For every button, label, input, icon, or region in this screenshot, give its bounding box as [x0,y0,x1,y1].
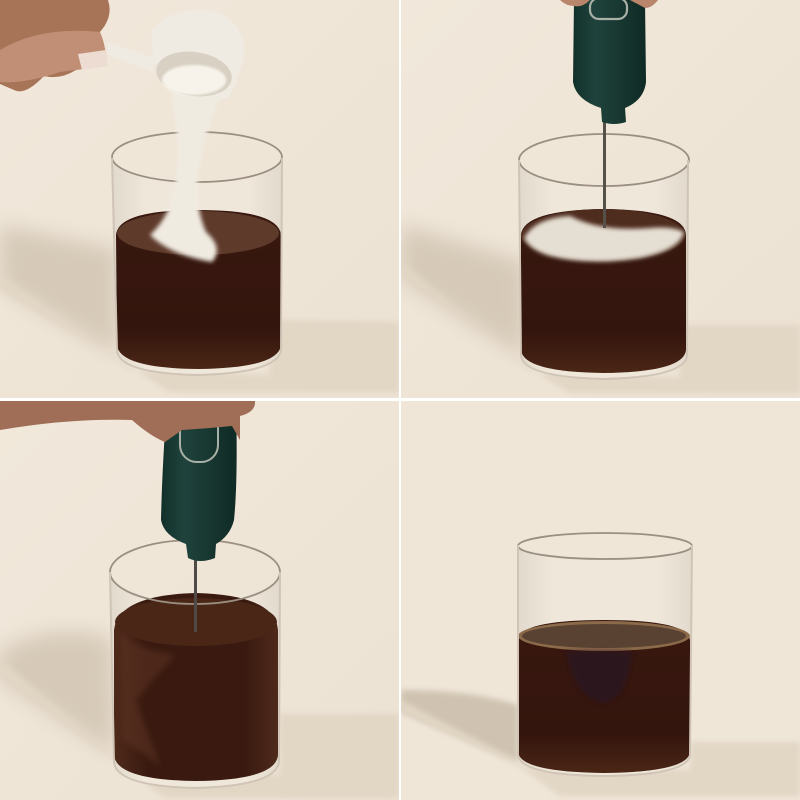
scoop [106,10,245,101]
frother [161,426,237,632]
powder on surface [524,216,684,262]
panel: step 4, finished drink [401,401,800,800]
hand [0,0,110,91]
glass of coffee [112,132,282,375]
panel: step 3, frothing [0,401,399,800]
glass of coffee [110,540,280,788]
hand [560,0,658,8]
glass of coffee [519,134,689,379]
glass of coffee [518,533,692,776]
powder stream [150,88,224,262]
panel: step 2, frother in powder [401,0,800,398]
hand [0,401,255,442]
frother [573,0,646,228]
panel: step 1, pouring powder [0,0,399,398]
